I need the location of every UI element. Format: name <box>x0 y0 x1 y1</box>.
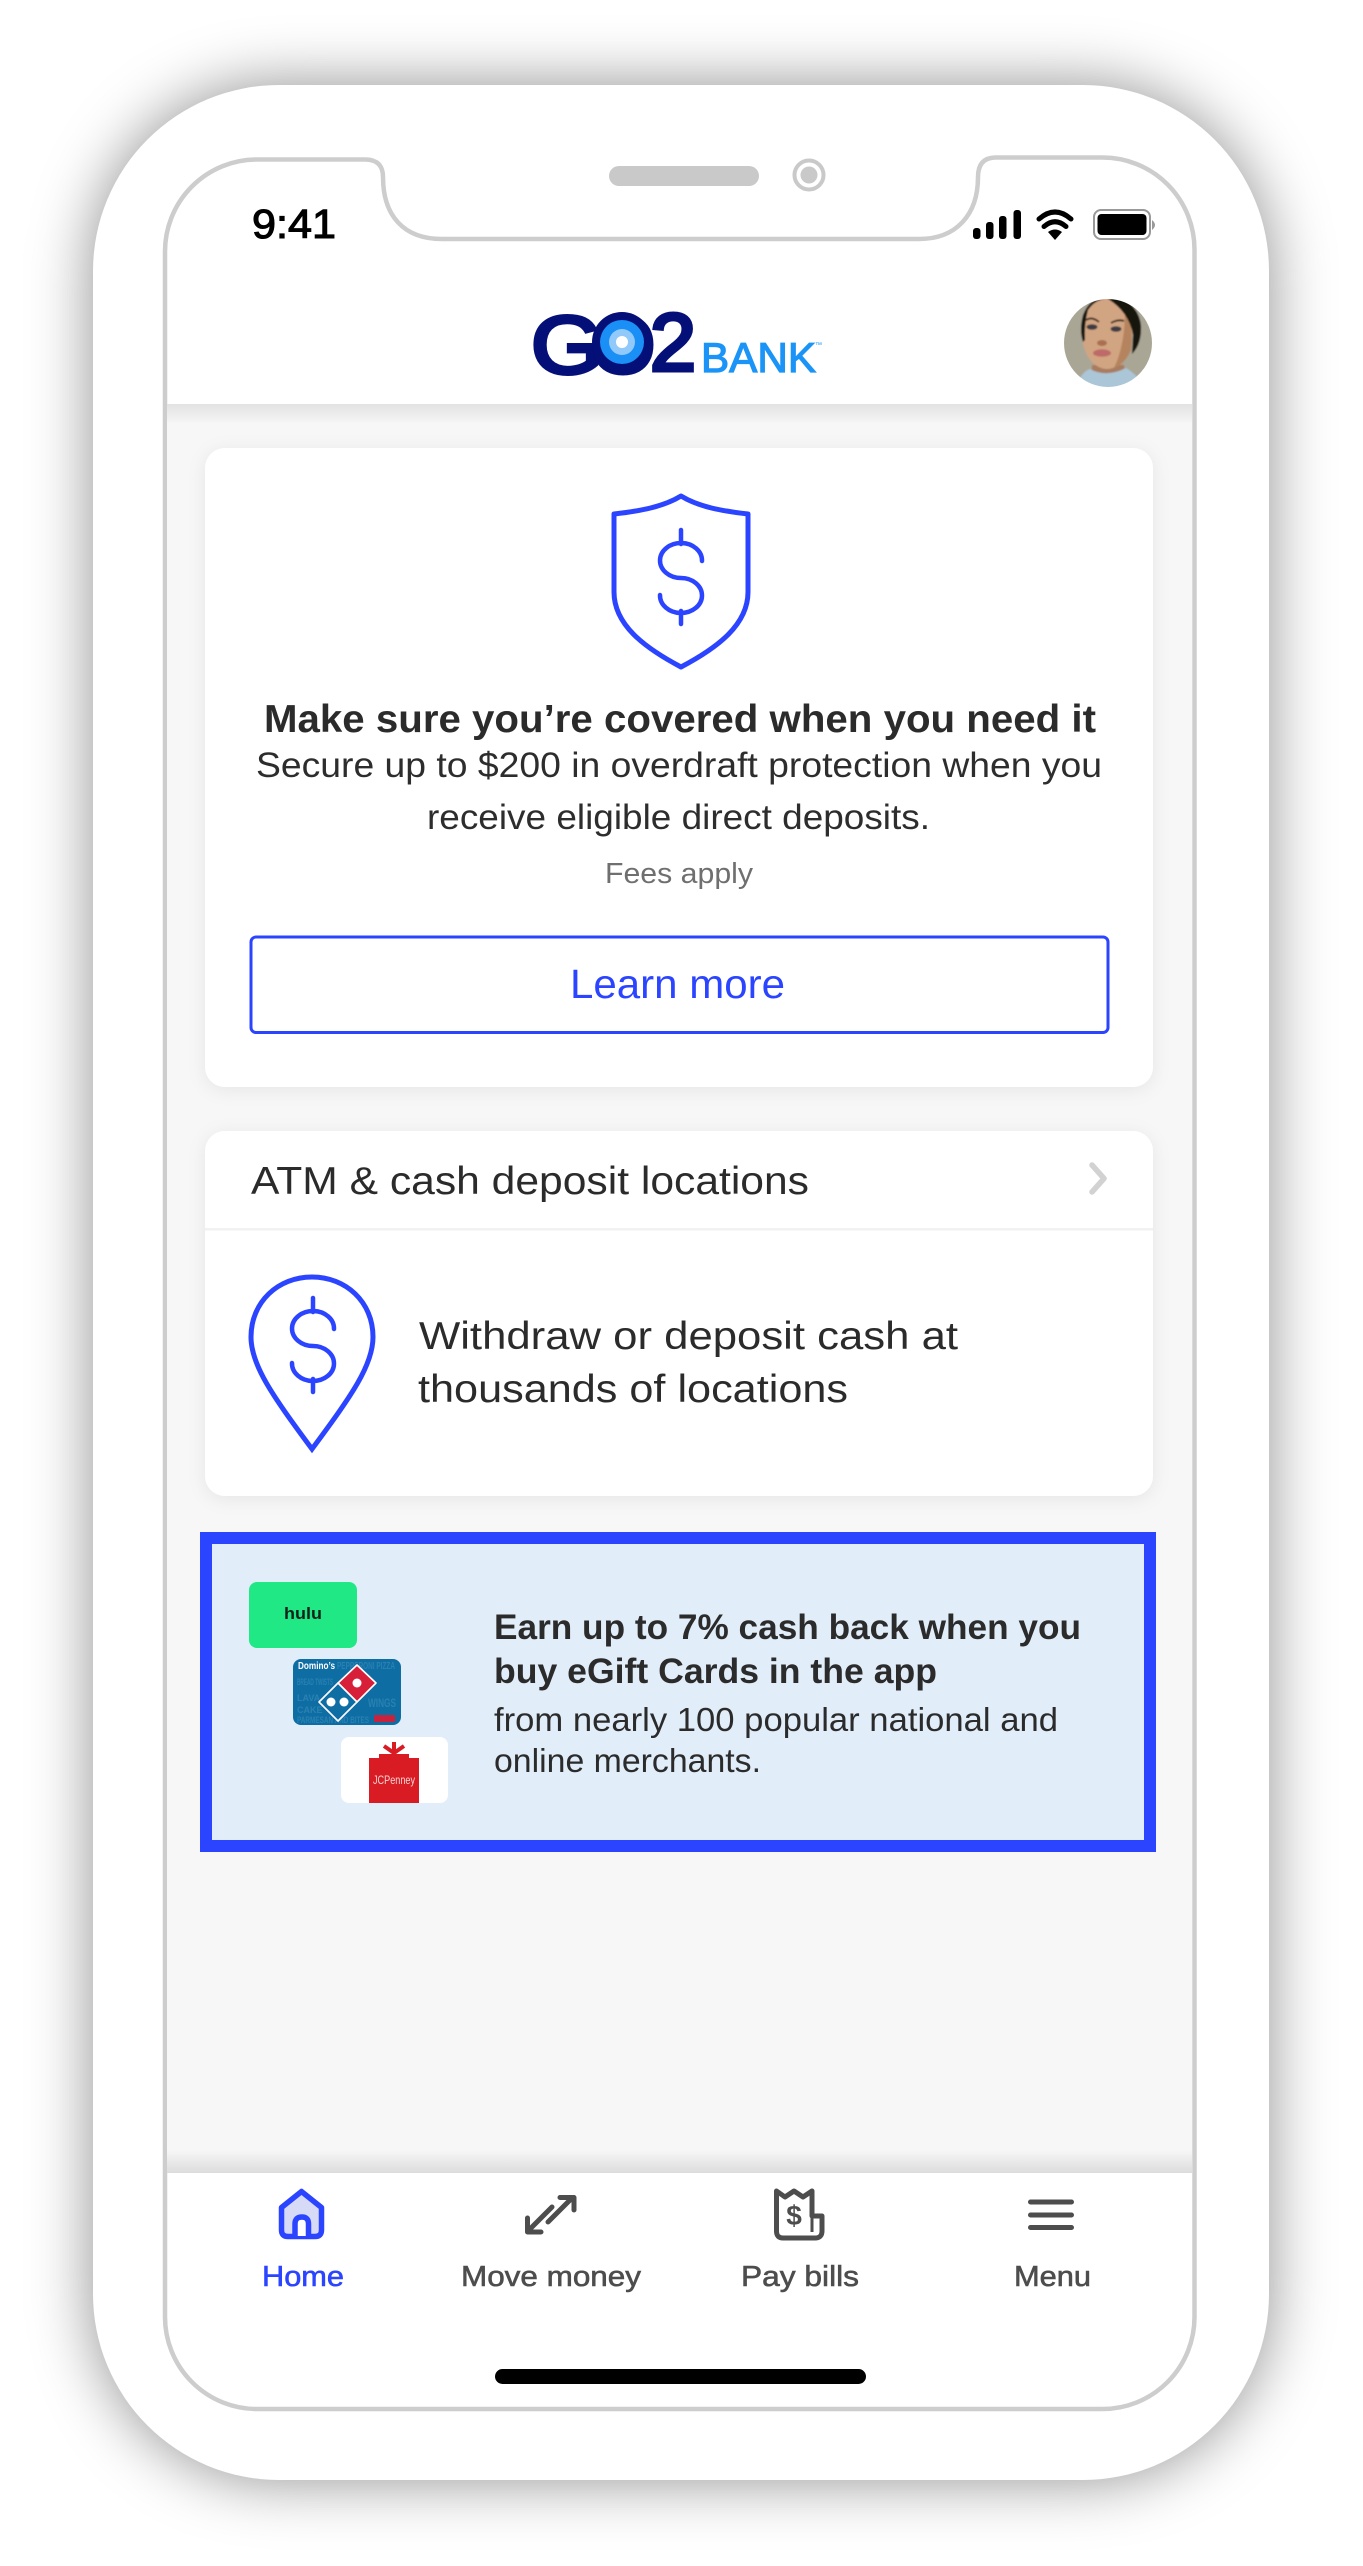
icon: battery <box>1094 210 1155 239</box>
button: learn more: Learn more <box>570 961 785 1007</box>
icon: JCPenney gift card: JCPenney <box>373 1773 415 1787</box>
icon: hulu gift card <box>249 1582 357 1648</box>
nav item: move money: Move money <box>461 2261 642 2293</box>
nav item: menu <box>1014 2202 1091 2293</box>
promo body: online merchants. <box>494 1742 761 1779</box>
nav item: home: Home <box>262 2261 344 2293</box>
header shadow <box>167 404 1192 416</box>
icon: Domino's gift card: PARMESAN AND BITES <box>297 1715 369 1725</box>
front camera <box>794 160 824 190</box>
description text: thousands of locations <box>418 1368 848 1411</box>
panel: eGift card promo banner <box>206 1538 1150 1846</box>
icon: wifi <box>1039 212 1071 240</box>
profile avatar <box>1064 299 1152 387</box>
button: learn more <box>251 937 1108 1032</box>
nav item: home <box>262 2192 344 2293</box>
home indicator <box>495 2369 866 2384</box>
row heading: ATM & cash deposit locations <box>251 1160 809 1203</box>
icon: Domino's gift card: PEPPERONI PIZZA <box>337 1661 395 1672</box>
icon: home <box>282 2192 322 2236</box>
nav item: menu: Menu <box>1014 2261 1091 2293</box>
icon: chevron <box>1092 1165 1104 1192</box>
promo body: from nearly 100 popular national and <box>494 1701 1058 1738</box>
icon: Domino's gift card: WINGS <box>368 1696 396 1710</box>
heading: Make sure you’re covered when you need it <box>264 698 1096 741</box>
icon: Domino's gift card: CAKE <box>297 1705 323 1715</box>
icon: shield with dollar <box>614 496 748 667</box>
promo heading <box>494 1608 1081 1691</box>
nav item: move money <box>461 2198 642 2293</box>
screen outline with notch <box>165 157 1195 2409</box>
GO2 Bank logo: ™ <box>815 342 822 349</box>
nav item: pay bills <box>741 2191 859 2293</box>
icon: hamburger menu <box>1030 2202 1072 2228</box>
promo body <box>494 1701 1058 1779</box>
GO2 Bank logo: G <box>531 300 603 391</box>
body text: Secure up to $200 in overdraft protection when you <box>256 746 1102 785</box>
icon: receipt: $ <box>786 2200 802 2231</box>
app content area <box>167 404 1192 2173</box>
earpiece speaker <box>609 166 759 186</box>
GO2 Bank logo: BANK <box>701 334 816 381</box>
fees note: Fees apply <box>605 858 754 890</box>
icon: Domino's gift card: LAVA <box>297 1693 321 1703</box>
nav item: pay bills: Pay bills <box>741 2261 859 2293</box>
icon: location pin with dollar <box>251 1277 373 1449</box>
panel: overdraft protection card <box>205 448 1153 1087</box>
GO2 Bank logo: 2 <box>650 298 696 388</box>
body text <box>256 746 1102 837</box>
icon: hulu gift card: hulu <box>284 1604 322 1623</box>
bottom navigation bar <box>262 2191 1091 2293</box>
icon: signal bars <box>973 210 1021 239</box>
icon: Domino's gift card: Domino’s <box>298 1661 335 1672</box>
icon: Domino's gift card: BREAD TWISTS <box>297 1677 333 1687</box>
status bar time: 9:41 <box>252 201 336 247</box>
GO2 Bank logo: O <box>590 300 656 391</box>
screen background <box>167 424 168 2150</box>
panel: ATM locations card <box>205 1131 1153 1496</box>
promo heading: Earn up to 7% cash back when you <box>494 1608 1081 1647</box>
icon: transfer arrows <box>528 2198 574 2232</box>
description text: Withdraw or deposit cash at <box>419 1315 958 1358</box>
status icons <box>973 210 1155 240</box>
icon: Domino's gift card <box>293 1659 401 1725</box>
body text: receive eligible direct deposits. <box>427 798 930 837</box>
promo heading: buy eGift Cards in the app <box>494 1652 937 1691</box>
GO2 Bank logo <box>531 298 822 391</box>
icon: JCPenney gift card <box>341 1737 448 1803</box>
description text <box>418 1315 958 1411</box>
footer shadow <box>167 2157 1192 2173</box>
